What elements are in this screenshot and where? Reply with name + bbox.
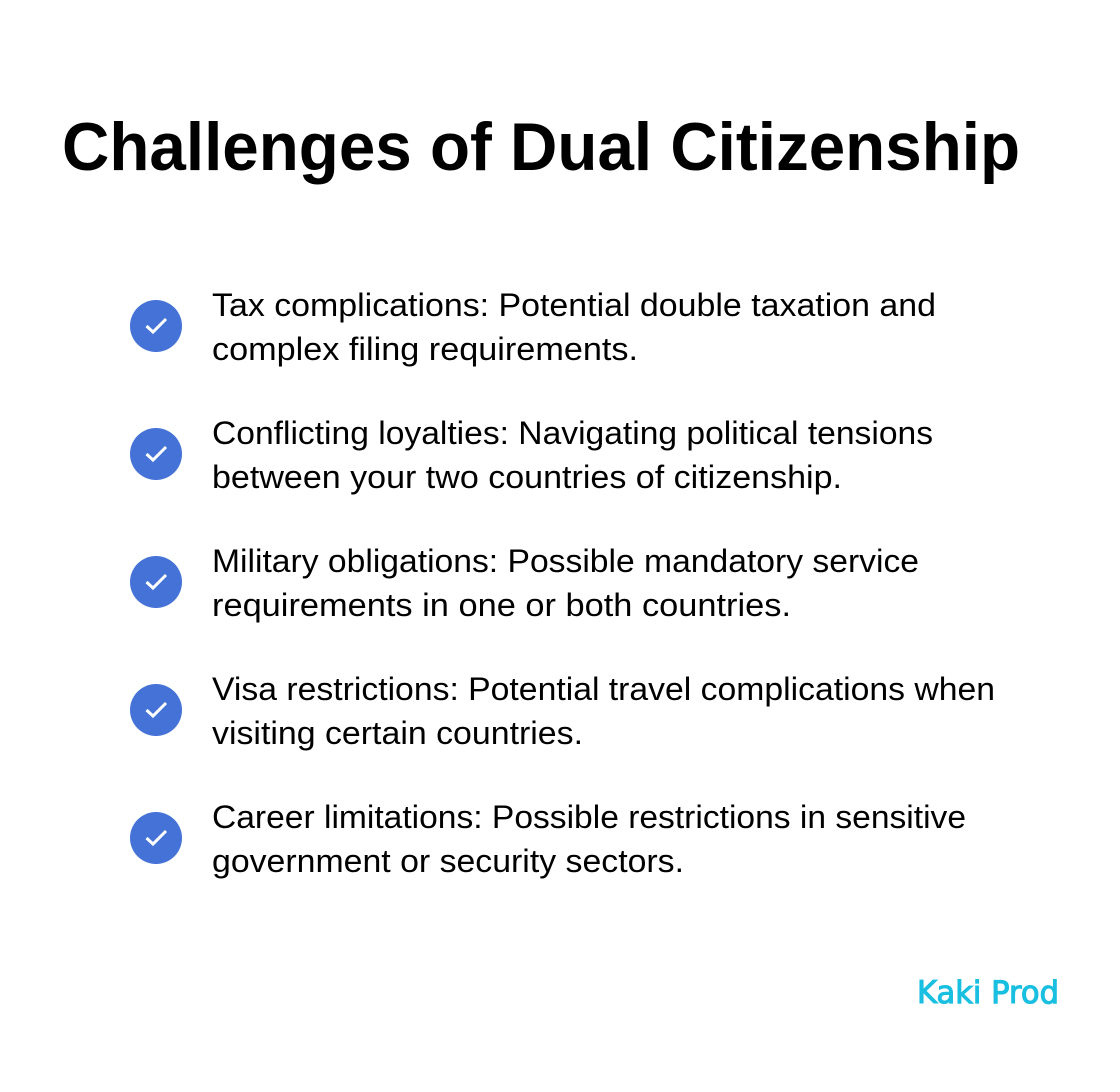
title: Challenges of Dual Citizenship <box>62 109 1020 185</box>
item: tax complications <box>130 287 936 367</box>
text: military obligations: Military obligations: Possible mandatory service <box>212 543 919 579</box>
text: career limitations: Career limitations: Possible restrictions in sensitive <box>212 799 966 835</box>
text: conflicting loyalties <box>212 415 933 495</box>
icon: check circle <box>130 428 182 480</box>
text: conflicting loyalties: between your two countries of citizenship. <box>212 459 842 495</box>
icon: check circle <box>130 556 182 608</box>
text: visa restrictions: Visa restrictions: Potential travel complications when <box>212 671 995 707</box>
icon: check circle <box>130 812 182 864</box>
item: military obligations <box>130 543 919 623</box>
logo: Kaki Prod: Kaki Prod <box>917 975 1059 1011</box>
icon: check circle <box>130 684 182 736</box>
text: visa restrictions <box>212 671 995 751</box>
text: tax complications <box>212 287 936 367</box>
text: visa restrictions: visiting certain countries. <box>212 715 583 751</box>
checklist <box>130 287 995 879</box>
text: career limitations: government or security sectors. <box>212 843 684 879</box>
text: career limitations <box>212 799 966 879</box>
item: career limitations <box>130 799 966 879</box>
text: conflicting loyalties: Conflicting loyalties: Navigating political tensions <box>212 415 933 451</box>
text: tax complications: Tax complications: Potential double taxation and <box>212 287 936 323</box>
item: conflicting loyalties <box>130 415 933 495</box>
text: military obligations <box>212 543 919 623</box>
item: visa restrictions <box>130 671 995 751</box>
text: tax complications: complex filing requirements. <box>212 331 638 367</box>
text: military obligations: requirements in one or both countries. <box>212 587 791 623</box>
icon: check circle <box>130 300 182 352</box>
